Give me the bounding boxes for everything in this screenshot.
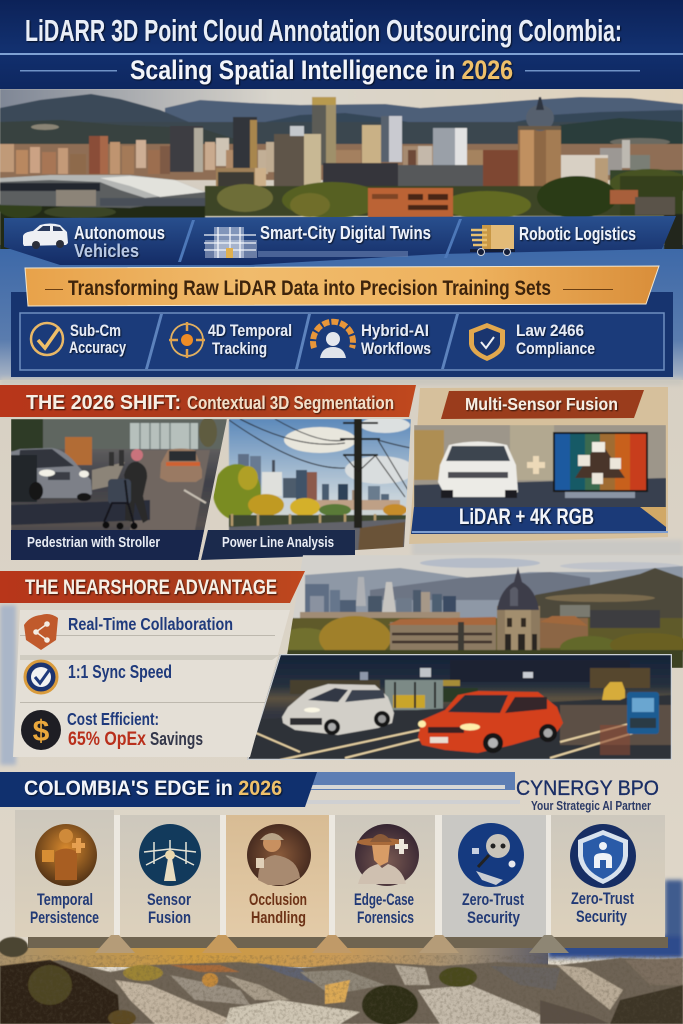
photo: Colombian cityscape and cathedral bbox=[275, 555, 683, 668]
skyline bbox=[238, 454, 250, 467]
background: paper section blue edges bbox=[0, 378, 683, 958]
card: occlusion handling: Handling bbox=[251, 909, 306, 927]
banner: the nearshore advantage bbox=[0, 571, 305, 603]
label: sub-cm accuracy bbox=[69, 321, 126, 357]
card: temporal persistence bbox=[15, 810, 114, 937]
photo: pedestrian with stroller bbox=[11, 417, 227, 560]
card: zero-trust security 2 bbox=[551, 815, 665, 937]
trees and greenery bbox=[205, 186, 625, 216]
subtitle: Scaling Spatial Intelligence in 2026 bbox=[130, 55, 513, 85]
photo: power line bbox=[213, 417, 415, 560]
icon: dollar bbox=[21, 710, 61, 750]
icon: compliance shield bbox=[469, 323, 505, 361]
banner: the nearshore advantage: THE NEARSHORE ADVANTAGE bbox=[25, 576, 277, 599]
label: law 2466 compliance: Law 2466 bbox=[516, 321, 584, 340]
label: robotic logistics: Robotic Logistics bbox=[519, 224, 636, 244]
card: zero-trust security 1 bbox=[442, 815, 546, 937]
long building bbox=[390, 622, 496, 650]
taxi bbox=[602, 682, 625, 700]
label: hybrid-AI workflows bbox=[361, 321, 431, 358]
icon: car bbox=[23, 224, 68, 249]
label: sub-cm accuracy: Accuracy bbox=[69, 338, 126, 357]
label: smart-city digital twins: Smart-City Digital Twins bbox=[260, 223, 431, 243]
caption: pedestrian with stroller bbox=[11, 530, 204, 560]
logo: Cynergy BPO: CYNERGY BPO bbox=[516, 777, 659, 800]
label: autonomous vehicles: Vehicles bbox=[74, 241, 139, 261]
card: occlusion handling bbox=[226, 815, 329, 937]
label: autonomous vehicles: Autonomous bbox=[74, 223, 165, 243]
towers bbox=[312, 104, 326, 166]
label: autonomous vehicles bbox=[74, 223, 165, 261]
far ranges bbox=[164, 96, 683, 123]
card posts bbox=[114, 815, 551, 937]
banner: the 2026 shift: THE 2026 SHIFT: bbox=[26, 392, 181, 414]
banner: colombia's edge: COLOMBIA'S EDGE in 2026 bbox=[24, 777, 282, 800]
caption: power line analysis: Power Line Analysis bbox=[222, 534, 334, 551]
header band bbox=[0, 0, 683, 89]
label: 4D temporal tracking: Tracking bbox=[212, 339, 267, 358]
label: cost efficient bbox=[67, 709, 203, 750]
card: sensor fusion: Fusion bbox=[148, 909, 191, 927]
card: occlusion handling: Occlusion bbox=[249, 891, 307, 909]
label: 4D temporal tracking: 4D Temporal bbox=[208, 321, 292, 340]
card: zero-trust security 1: Security bbox=[467, 909, 521, 927]
stadium bbox=[0, 180, 206, 209]
panel: nearshore advantages bbox=[13, 610, 290, 757]
label: hybrid-AI workflows: Workflows bbox=[361, 339, 431, 358]
photo: night traffic bbox=[247, 654, 672, 760]
banner: colombia's edge bbox=[0, 772, 520, 807]
card: sensor fusion bbox=[120, 815, 220, 937]
icon: hybrid AI person bbox=[313, 322, 353, 358]
card: temporal persistence: Persistence bbox=[30, 909, 99, 927]
icon: zero-trust magnifier bbox=[458, 823, 524, 887]
logo: Cynergy BPO bbox=[516, 777, 659, 813]
banner: transforming raw lidar: Transforming Raw LiDAR Data into Precision Training Sets bbox=[68, 277, 551, 300]
caption: pedestrian with stroller: Pedestrian with Stroller bbox=[27, 534, 160, 551]
card: temporal persistence: Temporal bbox=[37, 891, 93, 909]
yellow bus bbox=[385, 680, 443, 710]
cathedral bbox=[497, 606, 540, 651]
card: edge-case forensics bbox=[335, 815, 435, 937]
orange building bbox=[368, 188, 453, 218]
silver car bbox=[282, 684, 394, 735]
red car bbox=[418, 691, 563, 753]
label bar: LiDAR + 4K RGB bbox=[411, 504, 668, 534]
caption: power line analysis bbox=[201, 530, 355, 560]
panel: capabilities bbox=[11, 292, 673, 377]
warm low-rise band bbox=[0, 144, 683, 180]
distant lights bbox=[450, 662, 630, 682]
icon: digital twin building bbox=[204, 227, 408, 258]
blue-grey skyline bbox=[305, 584, 329, 614]
label: 4D temporal tracking bbox=[208, 321, 292, 358]
label: sub-cm accuracy: Sub-Cm bbox=[70, 321, 121, 340]
foreground trees bbox=[560, 636, 612, 650]
car right bbox=[160, 448, 202, 482]
photo: city skyline bbox=[0, 89, 683, 256]
domed tower bbox=[517, 130, 547, 187]
banner: multi-sensor fusion bbox=[441, 390, 644, 419]
pole and wires bbox=[354, 419, 362, 528]
banner: multi-sensor fusion: Multi-Sensor Fusion bbox=[465, 394, 618, 414]
road bbox=[407, 694, 671, 717]
icon: sensor fusion bbox=[139, 824, 201, 886]
background: rocky ground bbox=[0, 937, 683, 1024]
dark vegetation left bbox=[0, 960, 120, 1024]
banner: transforming raw lidar bbox=[25, 266, 659, 306]
icon: share badge bbox=[24, 614, 58, 650]
card: zero-trust security 1: Zero-Trust bbox=[462, 891, 524, 909]
label bar: LiDAR + 4K RGB: LiDAR + 4K RGB bbox=[459, 504, 594, 529]
pedestrians background bbox=[109, 452, 114, 466]
icon: temporal persistence bbox=[35, 824, 97, 886]
banner: the 2026 shift: Contextual 3D Segmentation bbox=[187, 393, 394, 413]
card: zero-trust security 2: Security bbox=[576, 908, 628, 926]
icon: logistics truck bbox=[470, 225, 515, 256]
background: blue mid band bbox=[0, 245, 683, 380]
logo: Cynergy BPO: Your Strategic AI Partner bbox=[531, 799, 651, 813]
card: edge-case forensics: Forensics bbox=[357, 909, 414, 927]
icon: sync check bbox=[25, 661, 57, 693]
foreground ground bbox=[291, 618, 683, 651]
blue vehicle bbox=[627, 692, 659, 734]
icon: dollar: $ bbox=[33, 715, 50, 748]
label: cost efficient: Savings bbox=[150, 729, 203, 749]
card: sensor fusion: Sensor bbox=[147, 891, 191, 909]
car left bbox=[11, 448, 92, 502]
panel: application strip bbox=[4, 216, 676, 265]
icon: occlusion handling bbox=[247, 824, 311, 886]
label: 1:1 sync speed: 1:1 Sync Speed bbox=[68, 662, 172, 682]
storefront background bbox=[40, 419, 227, 449]
card supports bbox=[95, 935, 569, 953]
panel: multi-sensor fusion bbox=[409, 387, 668, 544]
rock faces bbox=[115, 980, 240, 1024]
label: hybrid-AI workflows: Hybrid-AI bbox=[361, 321, 429, 340]
stroller and person bbox=[124, 462, 148, 523]
icon: zero-trust shield bbox=[570, 824, 636, 888]
right-side buildings bbox=[590, 610, 660, 628]
card: zero-trust security 2: Zero-Trust bbox=[571, 890, 634, 908]
road highlights bbox=[130, 450, 210, 530]
dark bushes bbox=[362, 985, 418, 1024]
icon: temporal target bbox=[169, 322, 205, 358]
banner: the 2026 shift bbox=[0, 385, 416, 417]
photo: car and sensor monitor bbox=[414, 425, 666, 509]
icon: edge-case forensics bbox=[355, 824, 419, 886]
label: real-time collaboration: Real-Time Collaboration bbox=[68, 614, 233, 634]
icon: check circle bbox=[31, 323, 63, 355]
label: law 2466 compliance: Compliance bbox=[516, 339, 595, 358]
label: cost efficient: Cost Efficient: bbox=[67, 709, 159, 729]
label: law 2466 compliance bbox=[516, 321, 595, 358]
card: edge-case forensics: Edge-Case bbox=[354, 891, 414, 909]
trees bbox=[213, 464, 261, 520]
label: cost efficient: 65% OpEx bbox=[68, 729, 146, 750]
fence bbox=[229, 515, 411, 527]
